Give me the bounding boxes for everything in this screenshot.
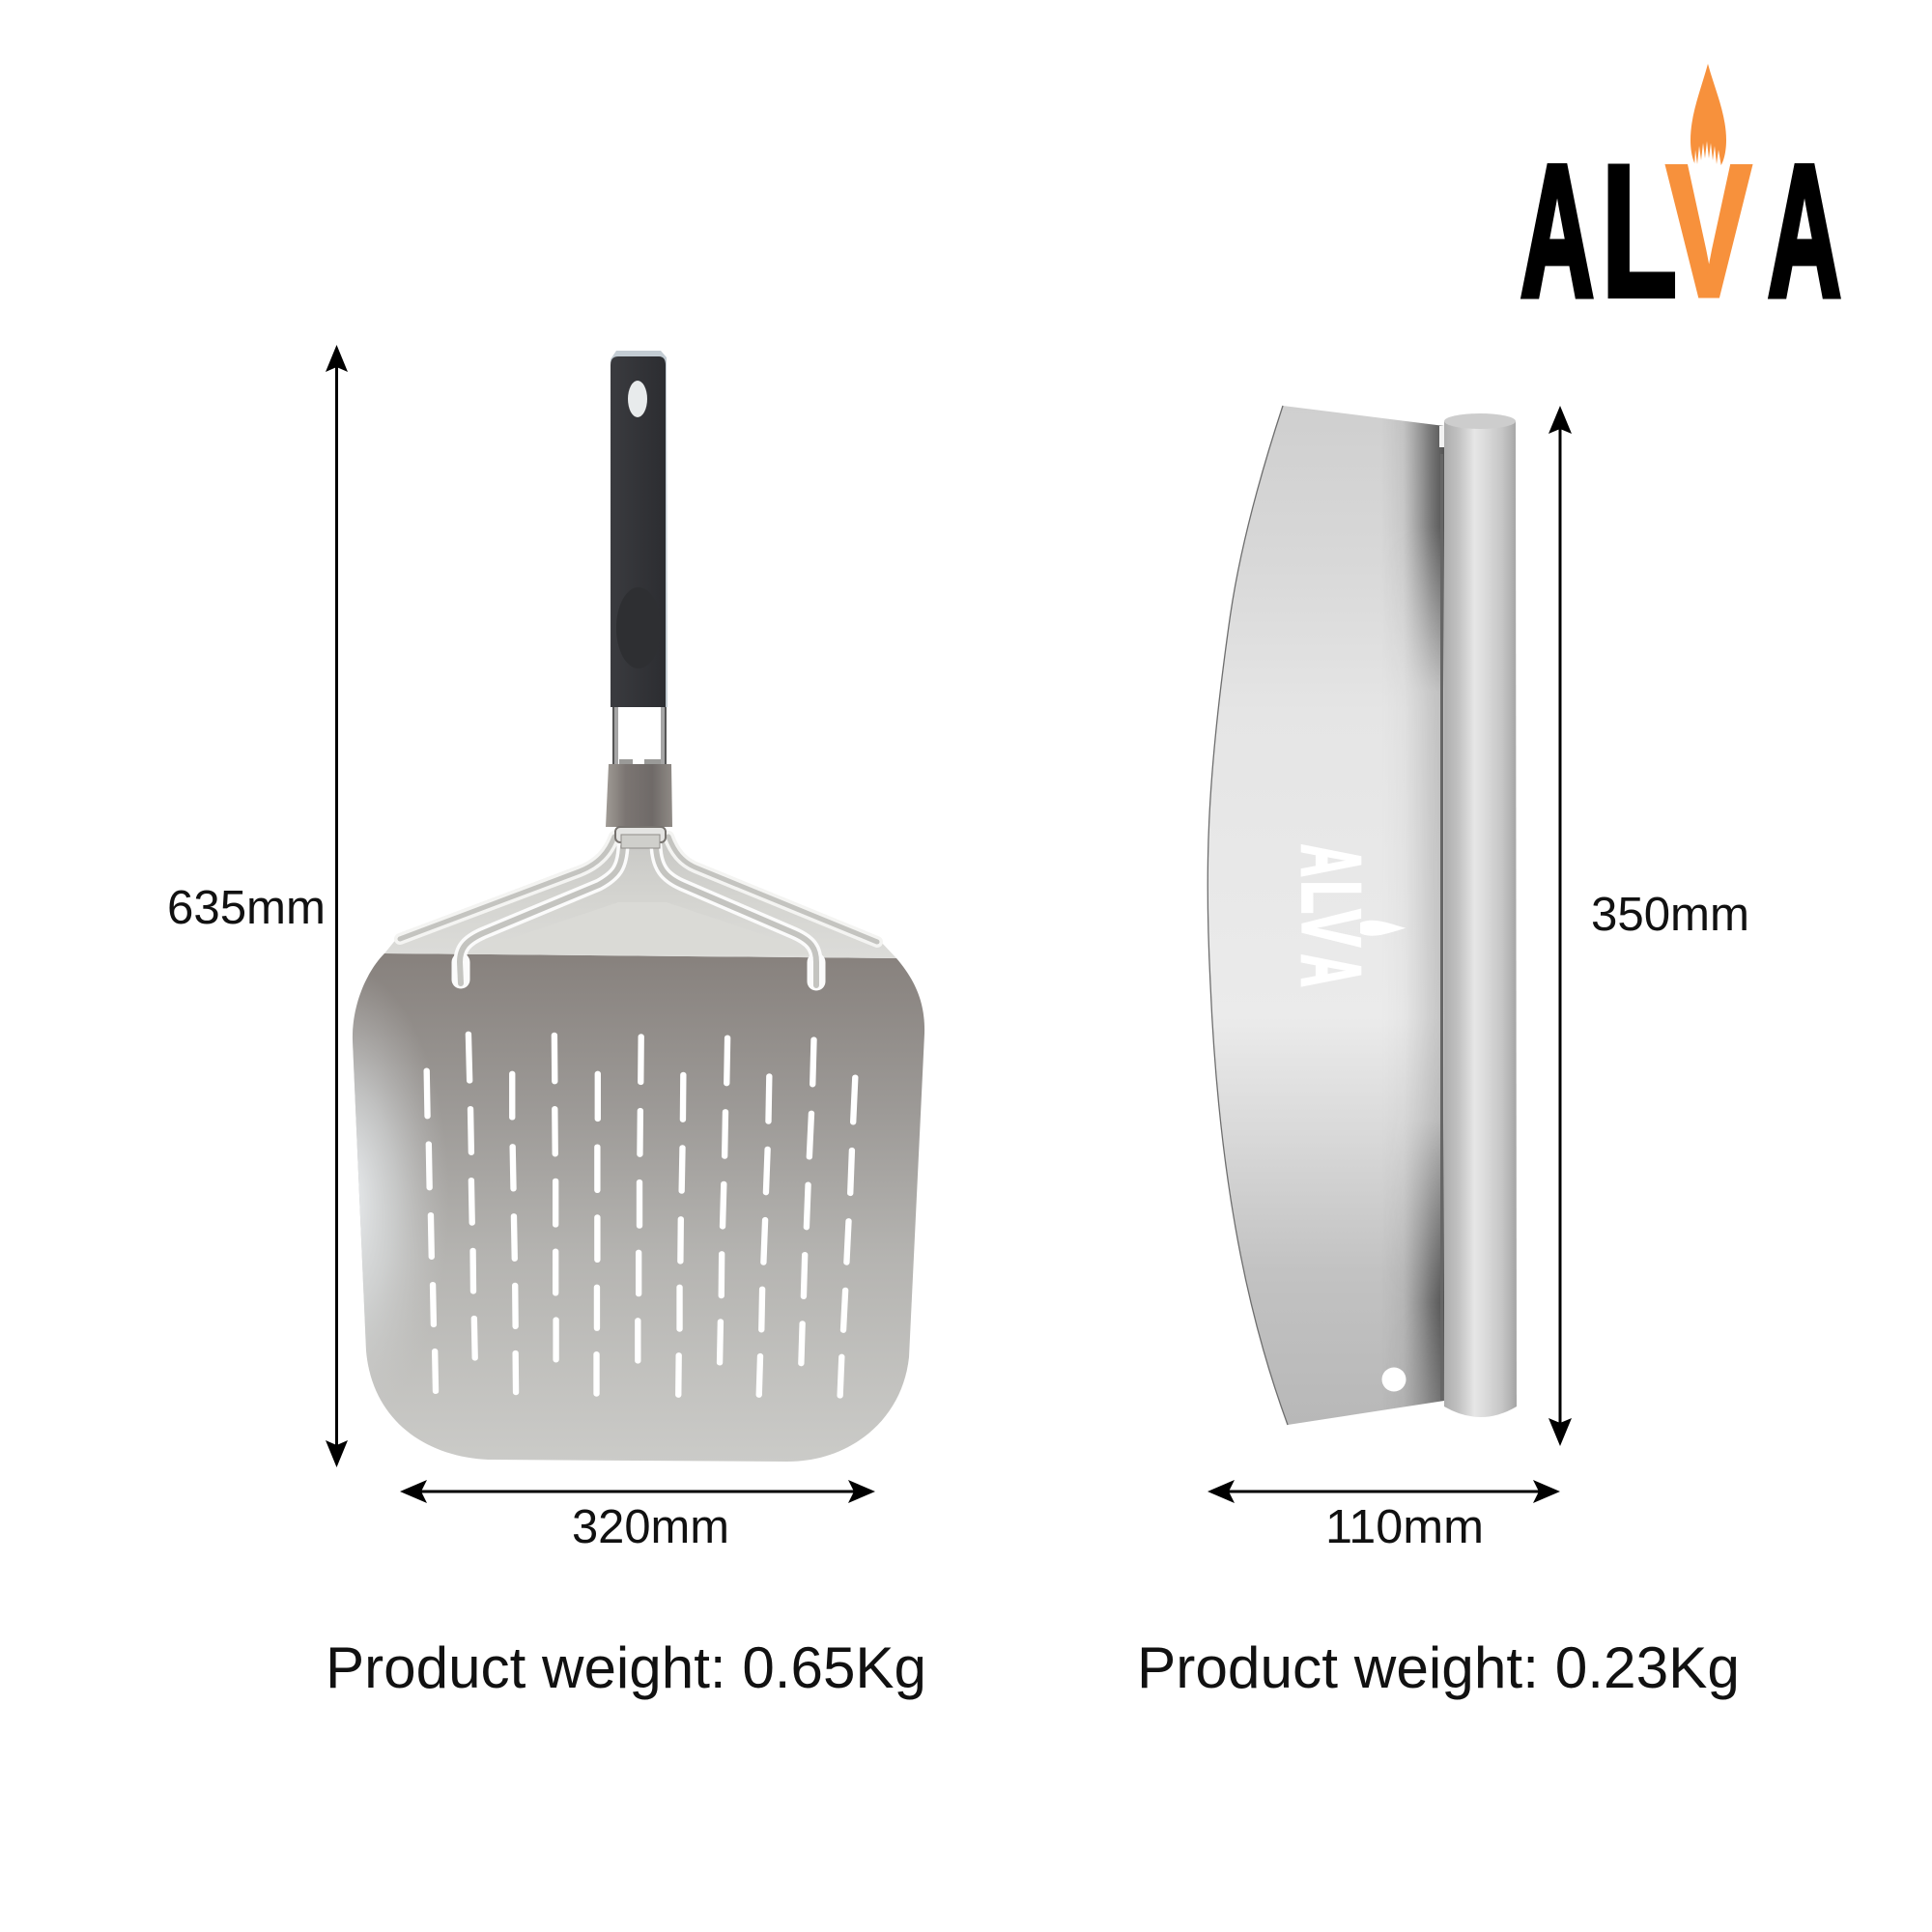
product: pizza peel — [353, 351, 924, 1462]
dimension arrow: cutter height — [1548, 406, 1572, 1446]
peel hinge bracket — [606, 707, 672, 848]
blade engraved logo: A — [1284, 954, 1377, 987]
label: peel weight: Product weight: 0.65Kg — [326, 1635, 926, 1700]
logo wordmark: L — [1602, 127, 1677, 336]
blade engraved logo: L — [1284, 880, 1377, 914]
label: cutter weight: Product weight: 0.23Kg — [1137, 1635, 1740, 1700]
label: peel width: 320mm — [572, 1501, 729, 1553]
dimension arrow: cutter width — [1208, 1480, 1560, 1503]
blade engraved logo — [1284, 844, 1406, 987]
peel handle — [611, 351, 668, 707]
blade engraved logo: V — [1284, 909, 1377, 947]
label: cutter height: 350mm — [1591, 889, 1749, 941]
logo flame — [1690, 64, 1726, 167]
peel slots — [427, 1034, 855, 1396]
cutter blade — [1208, 406, 1444, 1425]
infographic canvas — [170, 64, 1841, 1700]
product: rocker cutter — [1208, 406, 1517, 1425]
cutter roller handle — [1444, 413, 1517, 1417]
logo wordmark: V — [1666, 127, 1751, 336]
label: peel height: 635mm — [167, 882, 326, 934]
logo wordmark: A — [1768, 127, 1841, 336]
peel plate — [353, 838, 924, 1462]
dimension arrow: peel height — [326, 345, 348, 1467]
label: cutter width: 110mm — [1325, 1501, 1484, 1553]
peel wire frame — [400, 837, 877, 985]
logo wordmark: A — [1520, 127, 1594, 336]
brand logo: ALVA with flame — [1520, 64, 1841, 336]
blade engraved logo: A — [1284, 844, 1377, 877]
dimension arrow: peel width — [400, 1480, 875, 1503]
logo wordmark — [1520, 127, 1841, 336]
